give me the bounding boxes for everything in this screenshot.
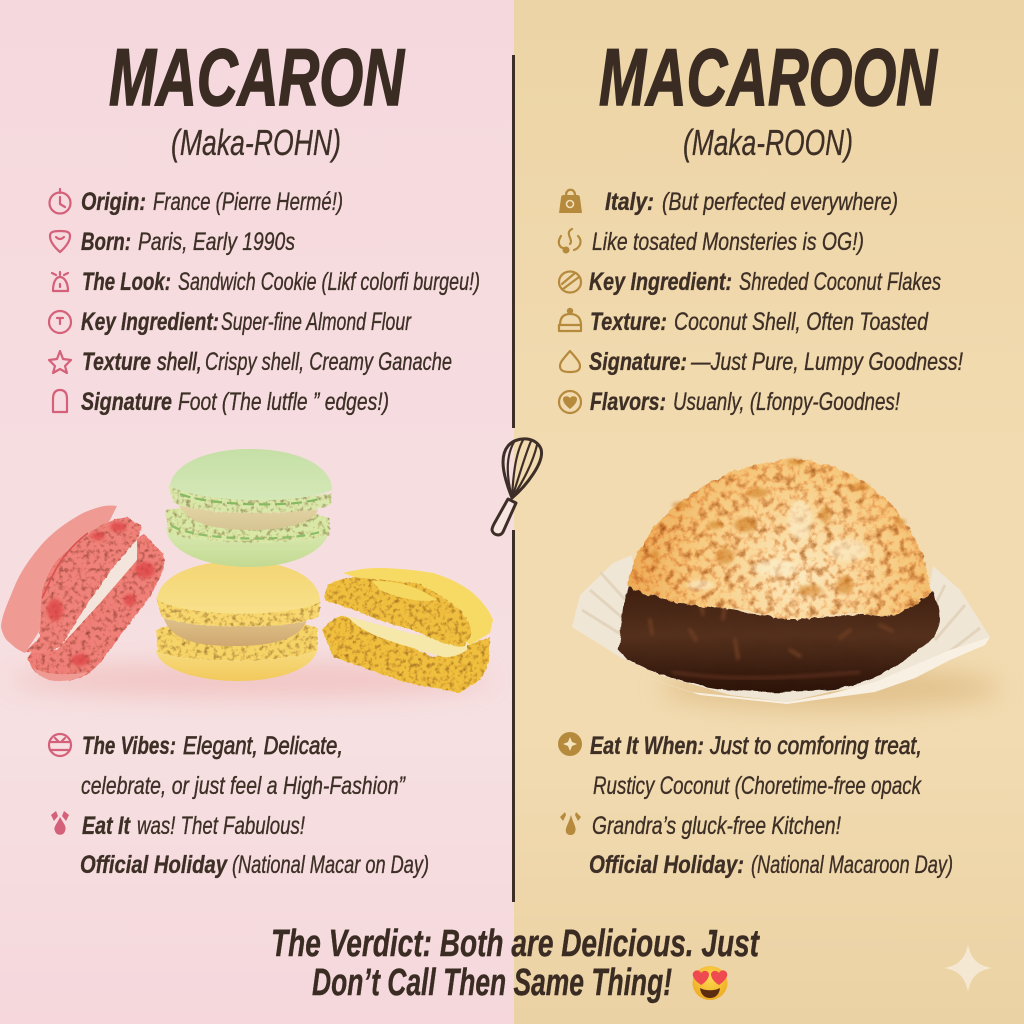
fact: flavors: Flavors: bbox=[590, 388, 666, 416]
panel: macaroon facts bbox=[559, 188, 963, 416]
fact: key ingredient bbox=[559, 268, 941, 296]
fact: origin: Origin: bbox=[81, 188, 146, 216]
panel: macaron lower facts bbox=[49, 732, 429, 879]
fact: texture: shell, bbox=[157, 348, 202, 376]
fact: signature bbox=[53, 388, 389, 416]
background: macaron side bbox=[0, 0, 514, 1024]
text: vibes continued: celebrate, or just feel a High-Fashion” bbox=[81, 772, 406, 800]
icon: whisk bbox=[492, 439, 542, 535]
subtitle: macaron pronunciation: (Maka-ROHN) bbox=[171, 122, 341, 163]
fact: born: Born: bbox=[81, 228, 131, 256]
fact: official holiday: Official Holiday bbox=[80, 851, 228, 879]
fact: signature: Foot (The lutfle ” edges!) bbox=[178, 388, 389, 416]
fact: eat it when bbox=[558, 732, 922, 760]
chocolate base bbox=[618, 580, 940, 691]
fact: the look: The Look: bbox=[82, 268, 171, 296]
fact: origin bbox=[50, 188, 343, 216]
fact: born bbox=[50, 228, 295, 256]
fact: official holiday bbox=[80, 851, 429, 879]
shadow under macaroon bbox=[660, 666, 1000, 710]
panel: macaroon lower facts bbox=[558, 732, 953, 879]
fact: key ingredient bbox=[49, 308, 412, 336]
fact: eat it: was! Thet Fabulous! bbox=[137, 812, 305, 840]
fact: key ingredient: Key Ingredient: bbox=[589, 268, 732, 296]
fact: eat it when: Eat It When: bbox=[590, 732, 704, 760]
fact: flavors: Usuanly, (Lfonpy-Goodnes! bbox=[673, 388, 900, 416]
fact: texture bbox=[49, 348, 452, 376]
fact: texture: Coconut Shell, Often Toasted bbox=[674, 308, 929, 336]
paper liner bbox=[572, 555, 990, 704]
fact: the look: Sandwich Cookie (Likf colorfi burgeu!) bbox=[178, 268, 480, 296]
fact: history: Like tosated Monsteries is OG!) bbox=[592, 228, 864, 256]
macaron: green stacked bbox=[165, 449, 332, 567]
fact: italy: (But perfected everywhere) bbox=[662, 188, 898, 216]
fact: italy: Italy: bbox=[605, 188, 654, 216]
fact: the look bbox=[52, 268, 480, 296]
fact: signature: Signature: bbox=[589, 348, 687, 376]
text: eat it when continued: Rusticy Coconut (Choretime-free opack bbox=[593, 772, 922, 800]
fact: flavors bbox=[559, 388, 900, 416]
verdict line 1: The Verdict: Both are Delicious. Just bbox=[271, 923, 760, 965]
fact: official holiday: Official Holiday: bbox=[589, 851, 744, 879]
center divider top bbox=[512, 55, 515, 428]
fact: texture bbox=[559, 308, 929, 336]
fact: key ingredient: Shreded Coconut Flakes bbox=[739, 268, 941, 296]
fact: origin: France (Pierre Hermé!) bbox=[153, 188, 343, 216]
fact: signature: Signature bbox=[81, 388, 172, 416]
icon: heart-eyes emoji bbox=[692, 966, 728, 1000]
fact: texture: Texture: bbox=[590, 308, 667, 336]
macaron: yellow bitten bbox=[322, 568, 493, 693]
fact: official holiday: (National Macaroon Day) bbox=[751, 851, 953, 879]
illustration: chocolate-dipped macaroon bbox=[572, 459, 1000, 710]
verdict bbox=[271, 923, 760, 1004]
verdict line 2: Don’t Call Then Same Thing! bbox=[312, 962, 672, 1004]
coconut dome bbox=[628, 459, 932, 620]
illustration: macarons bbox=[1, 449, 493, 698]
fact: eat it when: Just to comforing treat, bbox=[709, 732, 922, 760]
fact: official holiday: (National Macar on Day) bbox=[232, 851, 429, 879]
fact: key ingredient: Super-fine Almond Flour bbox=[221, 308, 412, 336]
fact: eat it bbox=[51, 811, 305, 840]
fact: grandma's kitchen: Grandra’s gluck-free Kitchen! bbox=[592, 812, 841, 840]
center divider bottom bbox=[512, 530, 515, 902]
macaron: red bitten bbox=[1, 505, 165, 681]
background: macaroon side bbox=[514, 0, 1024, 1024]
fact: texture: Crispy shell, Creamy Ganache bbox=[205, 348, 452, 376]
fact: official holiday bbox=[589, 851, 953, 879]
fact: key ingredient: Key Ingredient: bbox=[81, 308, 219, 336]
macaron: yellow stacked bbox=[156, 561, 320, 681]
fact: eat it: Eat It bbox=[82, 812, 131, 840]
shadow under macarons bbox=[10, 662, 490, 698]
fact: born: Paris, Early 1990s bbox=[138, 228, 295, 256]
icon: sparkle bbox=[944, 944, 992, 992]
fact: texture: Texture bbox=[82, 348, 151, 376]
fact: signature bbox=[560, 348, 963, 376]
fact: the vibes: The Vibes: bbox=[82, 732, 176, 760]
fact: the vibes bbox=[49, 732, 343, 760]
fact: italy bbox=[559, 188, 898, 216]
subtitle: macaroon pronunciation: (Maka-ROON) bbox=[683, 122, 853, 163]
fact: the vibes: Elegant, Delicate, bbox=[183, 732, 343, 760]
panel: macaron facts bbox=[49, 188, 480, 416]
title: macaron: MACARON bbox=[109, 33, 405, 123]
